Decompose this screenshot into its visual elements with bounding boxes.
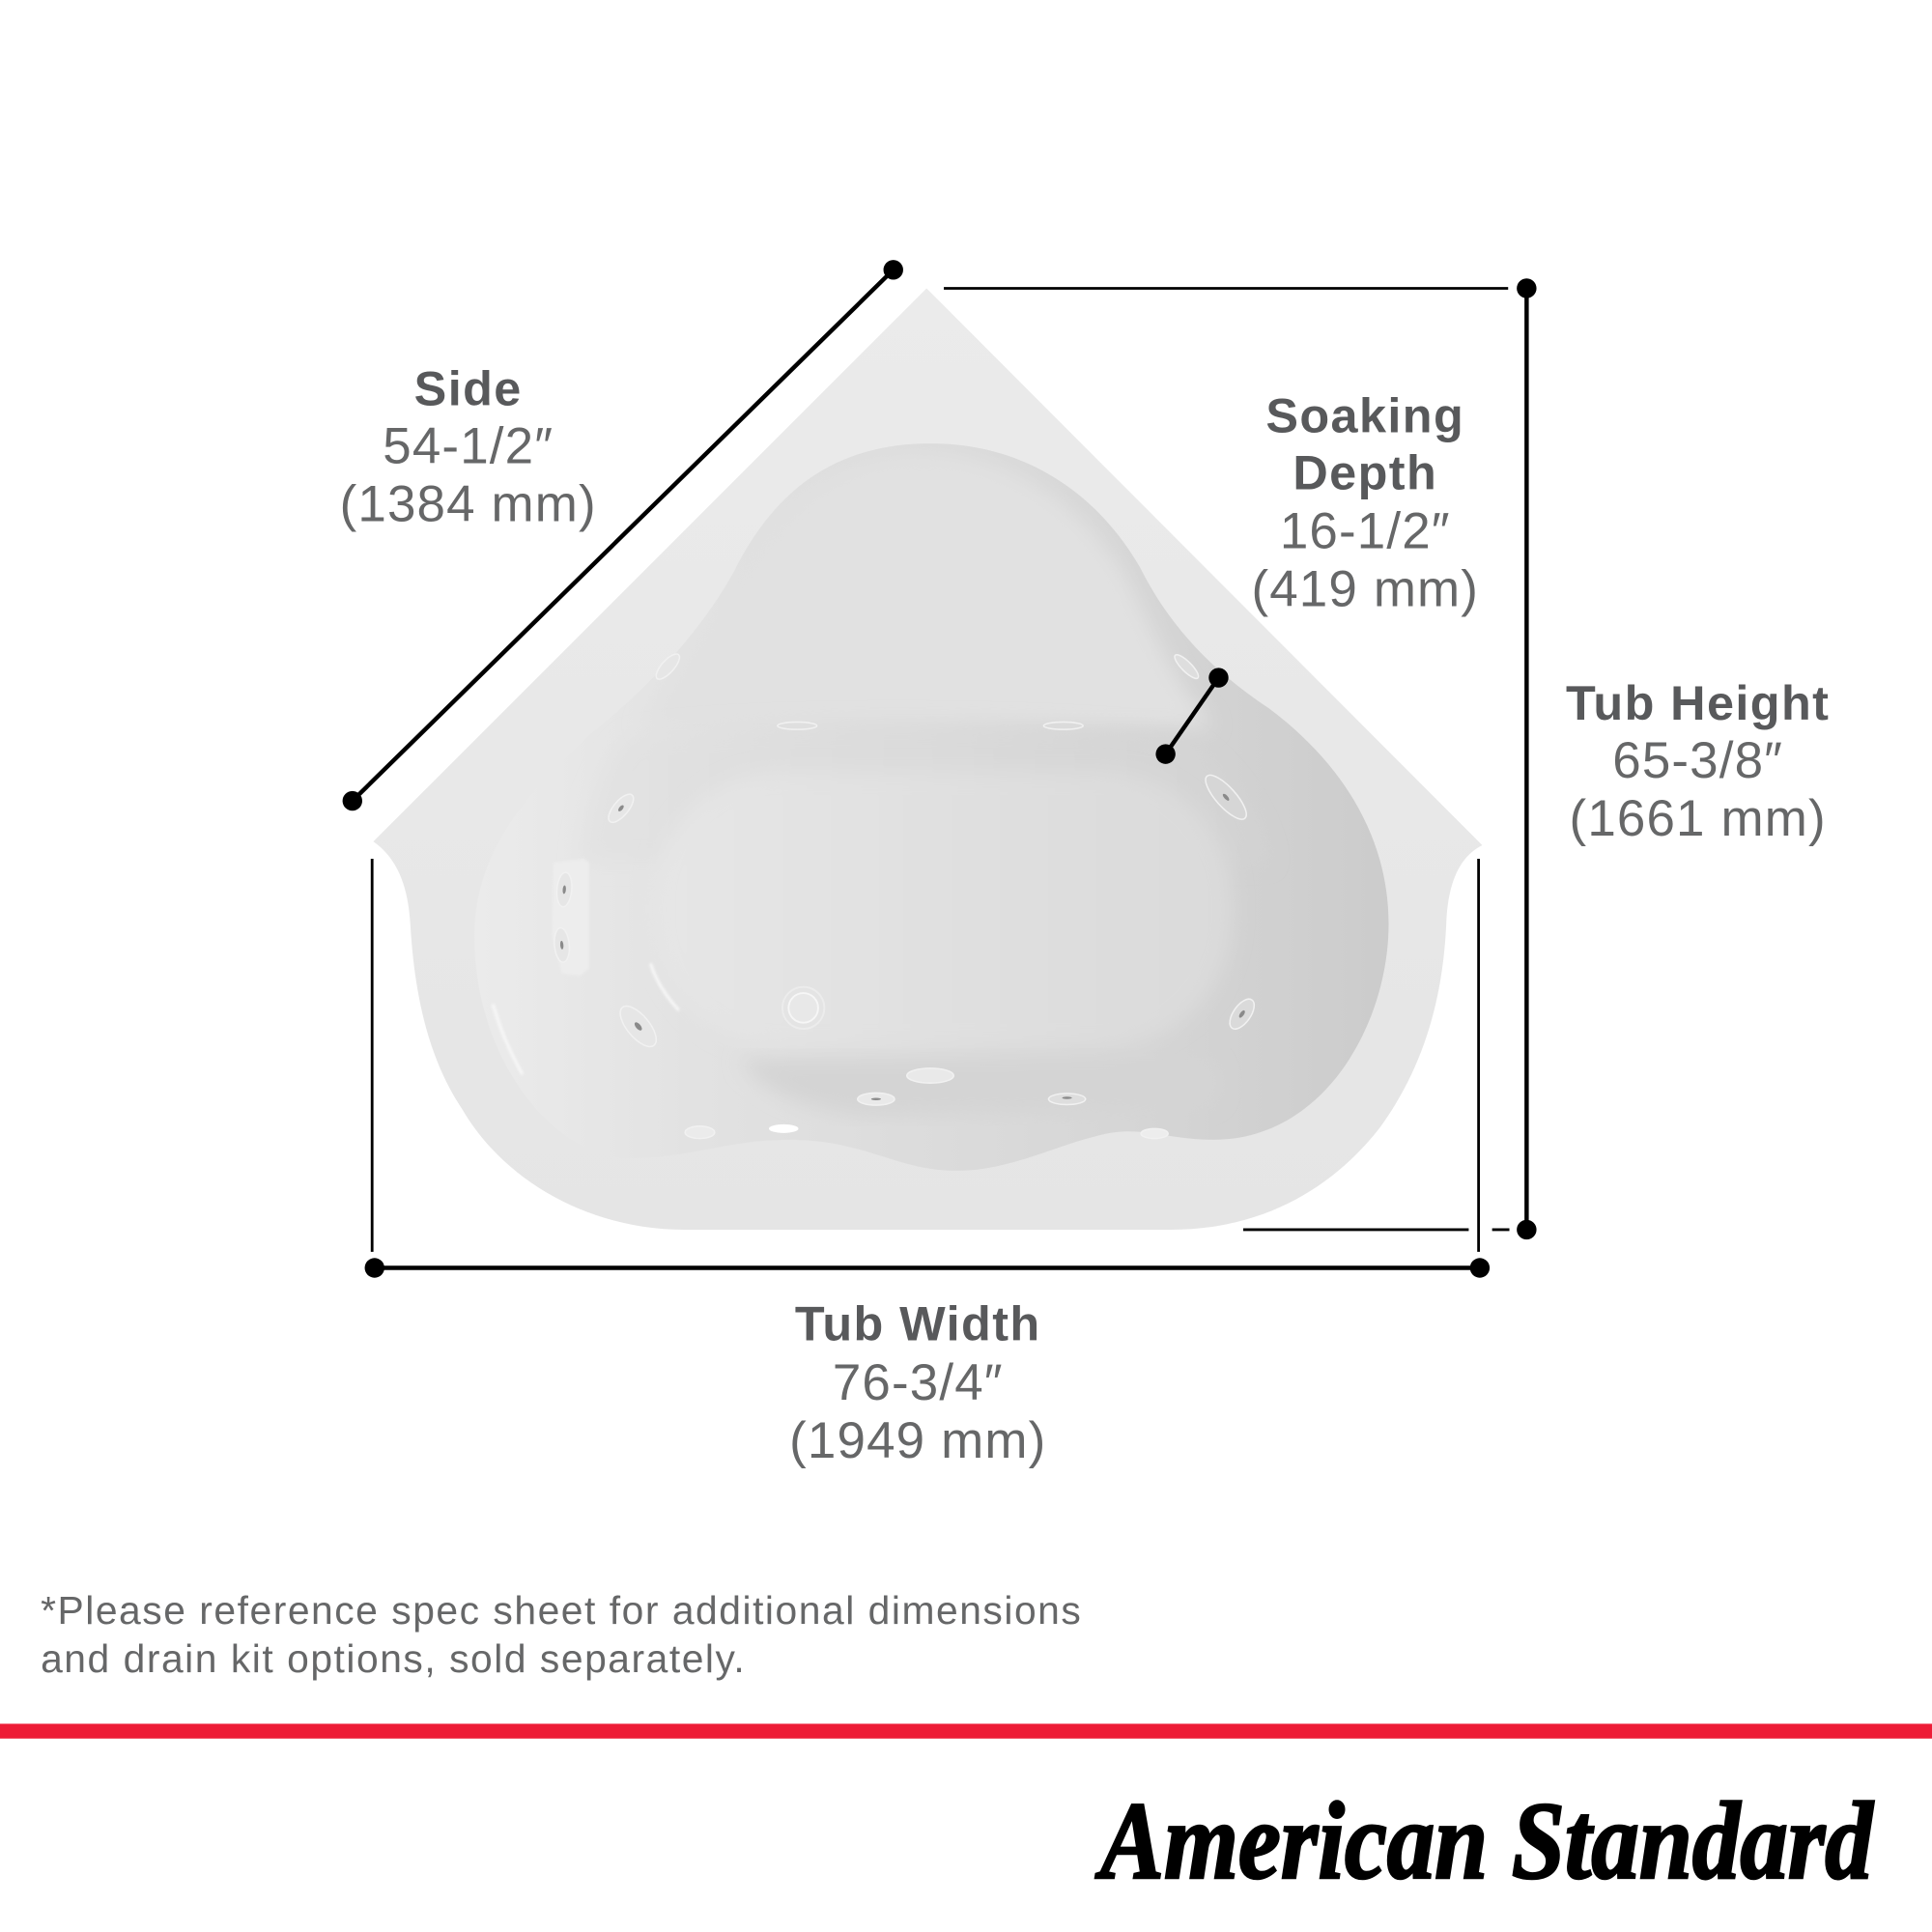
footnote: and drain kit options, sold separately.	[41, 1636, 746, 1681]
label: side: (1384 mm)	[340, 476, 597, 533]
tub floor	[1147, 862, 1219, 999]
label: side: Side	[414, 361, 523, 416]
footnote: *Please reference spec sheet for additional dimensions	[41, 1588, 1082, 1633]
overflow	[769, 1124, 799, 1133]
label: tub height: (1661 mm)	[1570, 790, 1827, 847]
label: soaking depth: (419 mm)	[1251, 561, 1479, 618]
label: tub width: Tub Width	[795, 1296, 1041, 1351]
label: tub height: Tub Height	[1566, 675, 1830, 730]
side dimension line	[343, 260, 903, 810]
tub illustration	[373, 288, 1482, 1230]
tub rim outline	[373, 288, 1482, 1230]
label: tub height: 65-3/8″	[1612, 732, 1783, 789]
seat area	[1014, 490, 1200, 724]
label: soaking depth: 16-1/2″	[1280, 503, 1451, 560]
front well shadow	[761, 1065, 905, 1105]
headrest	[552, 859, 589, 976]
label: tub width: 76-3/4″	[833, 1354, 1004, 1411]
soaking depth dimension line	[1155, 668, 1229, 764]
label: tub width: (1949 mm)	[789, 1412, 1046, 1469]
tub height dimension line	[1517, 278, 1537, 1239]
label: soaking depth: Depth	[1293, 444, 1437, 499]
tub basin	[456, 431, 1405, 1182]
jets	[553, 650, 1259, 1139]
red divider bar	[0, 1723, 1932, 1739]
jet nozzles	[560, 793, 1246, 1100]
drain	[782, 987, 824, 1029]
bench ledge shadow	[579, 724, 1269, 863]
tub width dimension line	[365, 1258, 1490, 1278]
label: side: 54-1/2″	[383, 418, 554, 475]
extension guide lines	[372, 288, 1509, 1252]
label: soaking depth: Soaking	[1265, 388, 1464, 443]
